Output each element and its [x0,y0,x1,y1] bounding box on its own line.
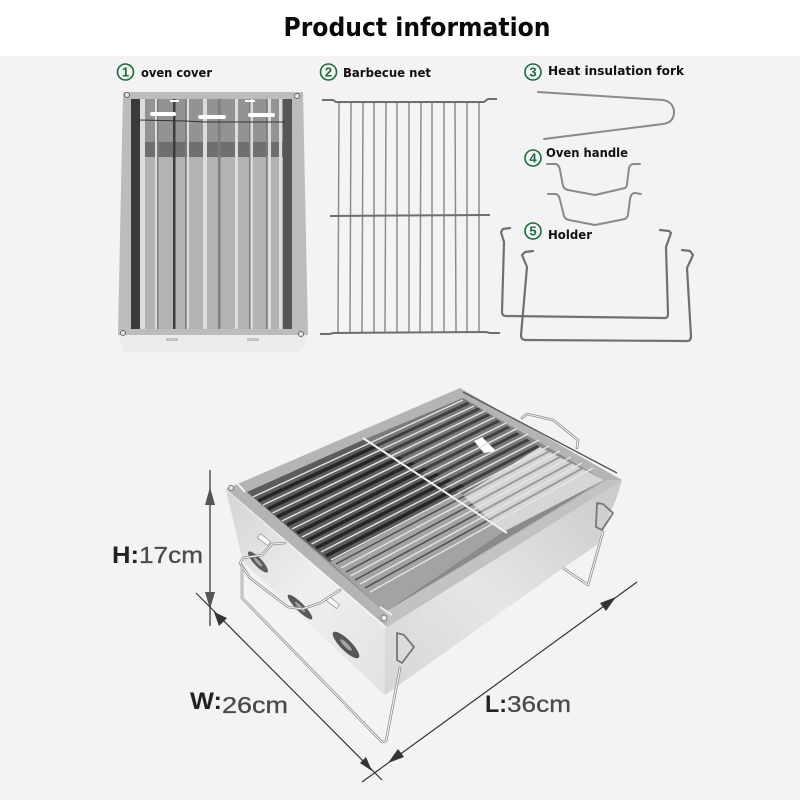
barbecue net part [320,99,500,334]
interior dark section [247,440,470,562]
heat insulation fork part [538,92,674,139]
right folding leg [563,532,603,585]
front folding leg [242,565,400,742]
right clip [596,503,613,530]
label 3: heat insulation fork: 3 [529,64,537,80]
right face [385,480,622,695]
grill product [226,388,622,742]
title: Product information [284,13,550,43]
interior back section [363,398,540,495]
label 1: oven cover: oven cover [141,66,212,80]
interior gray section [330,488,503,612]
label 2: barbecue net: 2 [325,64,332,80]
length dimension [362,582,637,782]
label 2: barbecue net [320,64,431,80]
label 2: barbecue net: Barbecue net [343,66,431,80]
holder parts [501,228,693,341]
grill bars [253,400,593,592]
label 4: oven handle [525,146,628,166]
width label: W: [190,688,222,715]
width label: 26cm [222,692,288,718]
label 4: oven handle: Oven handle [546,146,628,160]
width label [190,688,288,718]
width dimension [196,593,382,780]
left face [226,490,385,695]
length label [485,691,571,718]
label 5: holder: Holder [548,228,592,242]
corner screws [228,486,387,621]
bright reflection [474,437,496,453]
label 1: oven cover: 1 [122,64,129,80]
length label: 36cm [507,691,571,717]
length label: L: [485,691,507,718]
height label: H: [112,542,139,569]
height dimension [205,470,215,626]
oven cover part [118,92,308,352]
label 3: heat insulation fork: Heat insulation fork [548,64,685,78]
interior bright section [463,447,604,532]
label 4: oven handle: 4 [529,150,537,166]
label 5: holder: 5 [529,224,537,238]
interior reflections [258,403,588,588]
back handle [522,414,578,448]
front clip [397,633,414,663]
grill cross bars [237,392,617,615]
height label: 17cm [139,542,203,568]
interior base [247,398,604,612]
side handle [240,543,340,609]
label 1: oven cover [118,64,212,80]
top frame [226,388,622,627]
height label [112,542,203,569]
vent holes [246,549,363,662]
latches [257,534,340,609]
front right rim highlight [385,480,622,627]
label 5: holder [525,223,592,242]
oven handle parts [547,164,641,225]
